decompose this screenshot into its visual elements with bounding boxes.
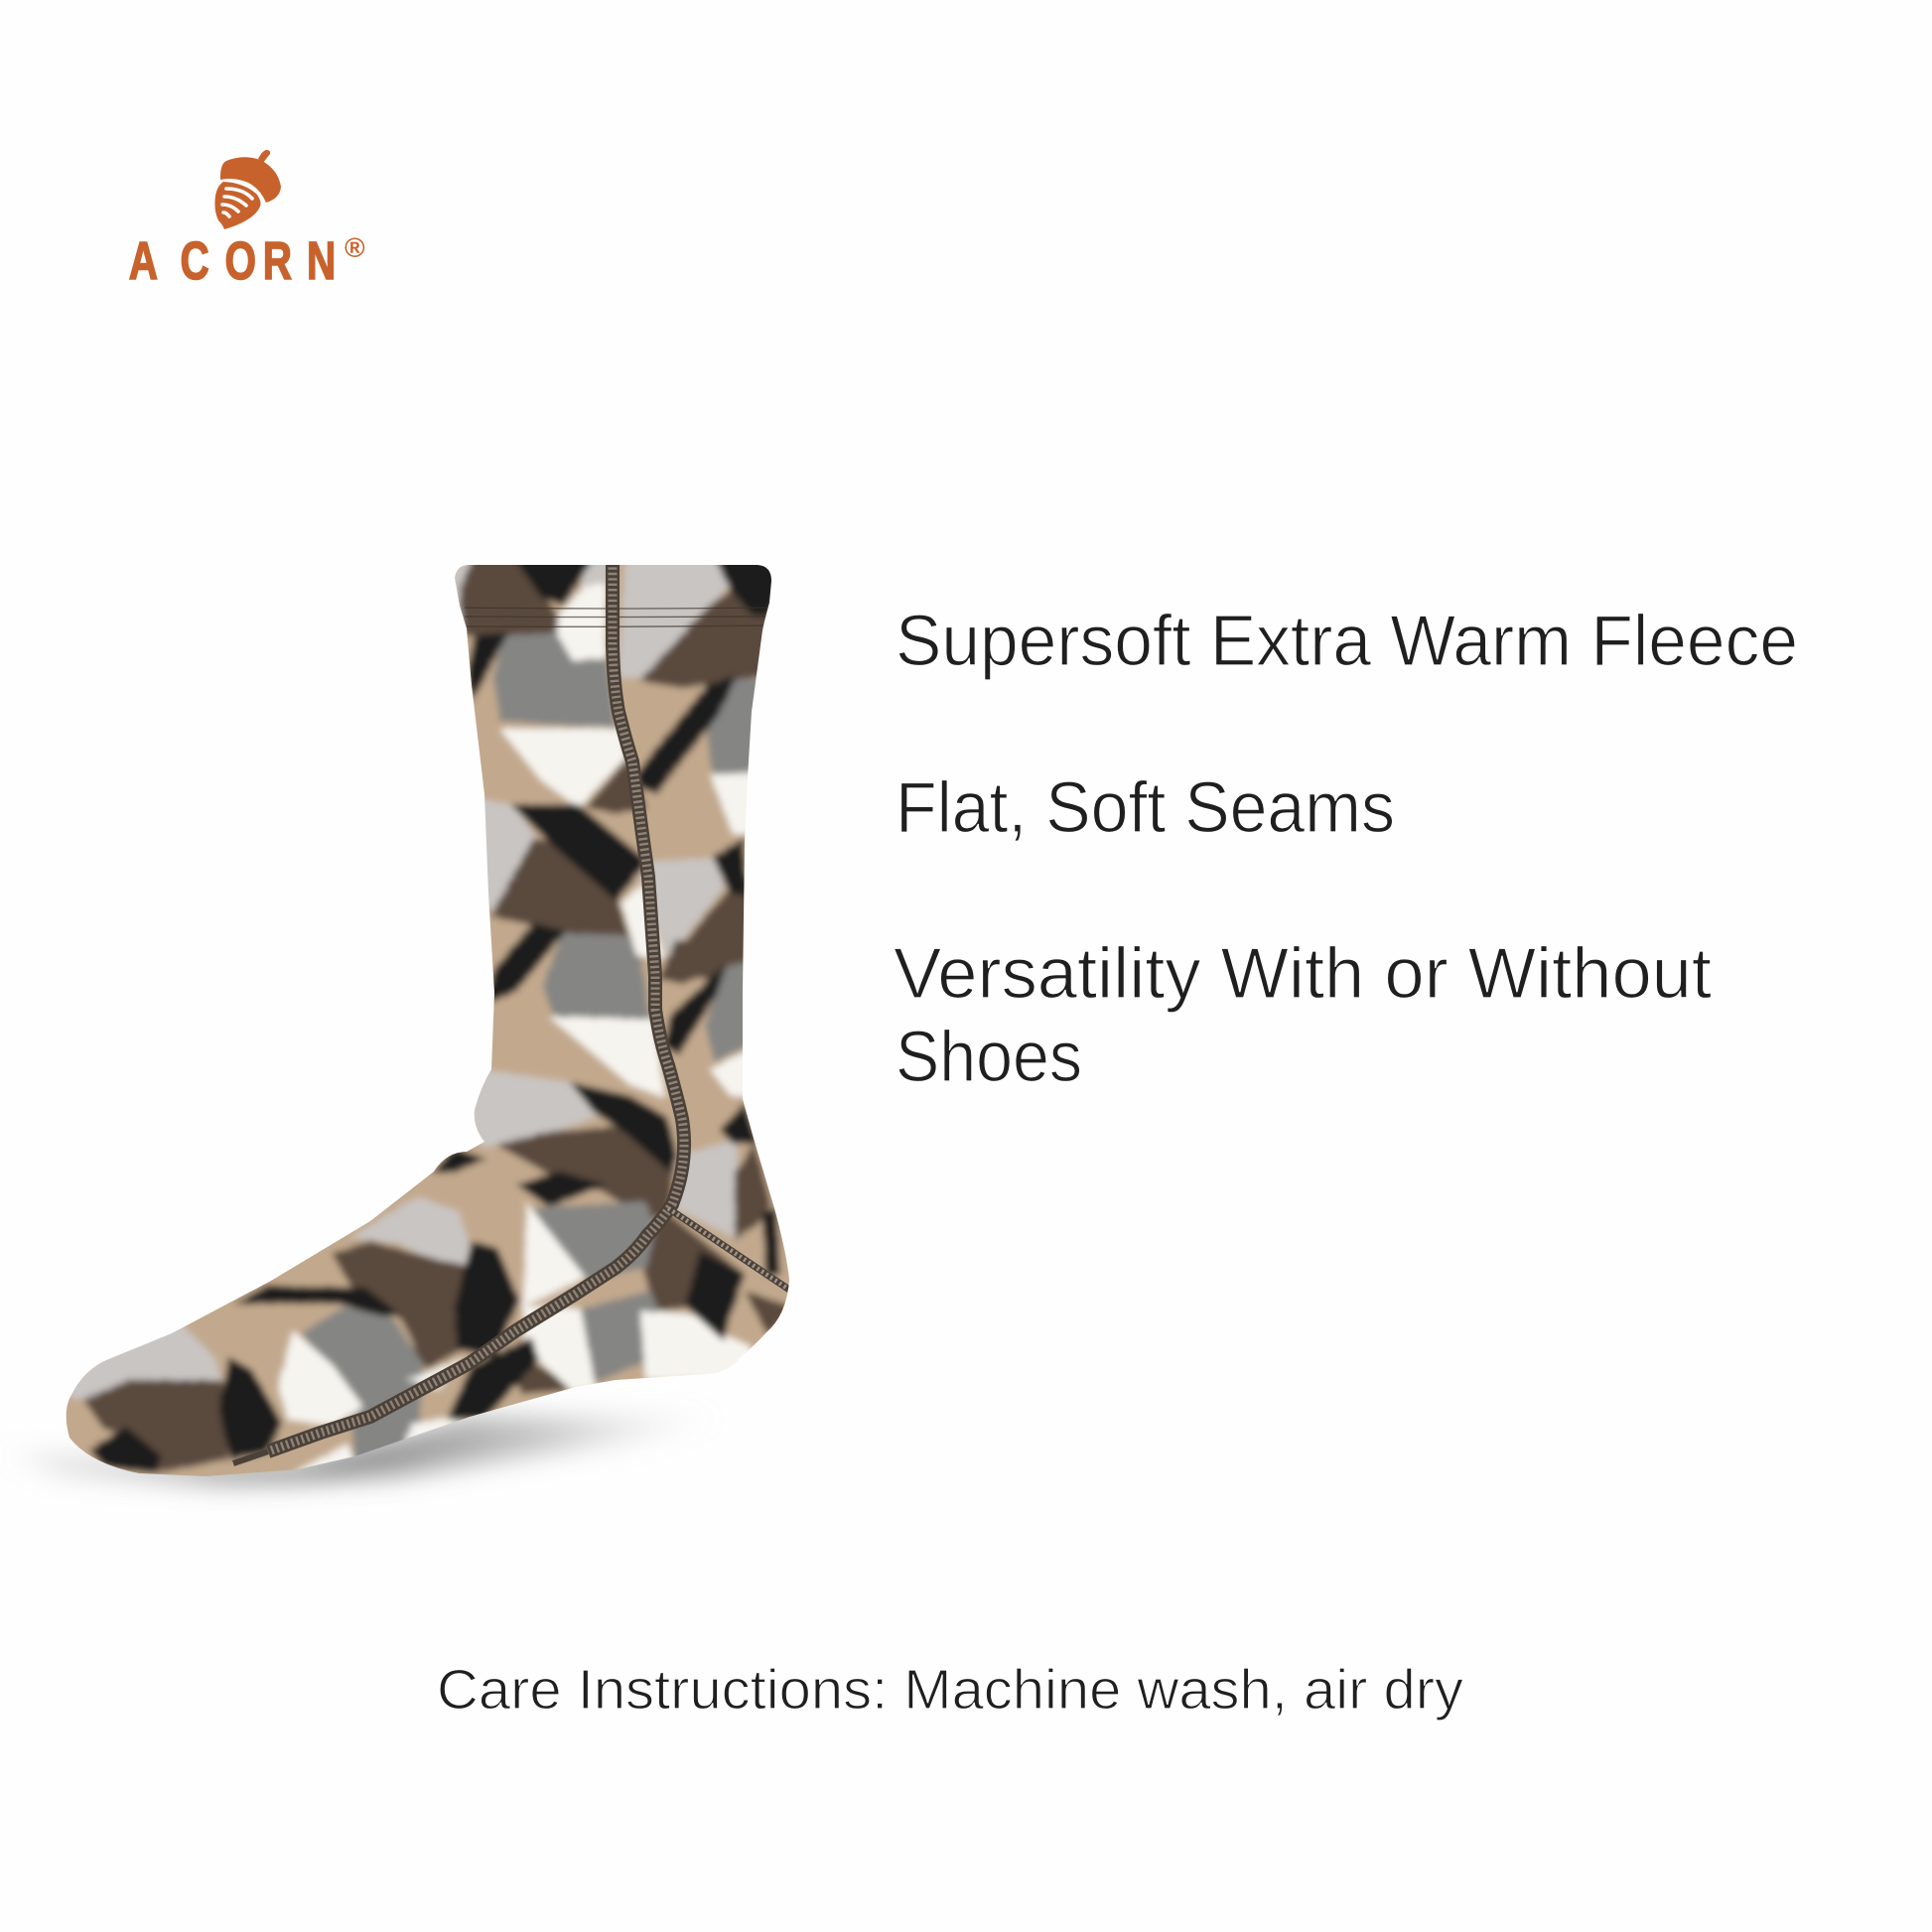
feature: versatility: Versatility With or Without bbox=[894, 934, 1712, 1014]
product image: camo fleece sock bbox=[40, 546, 814, 1489]
feature: versatility bbox=[894, 934, 1712, 1097]
seam: leg to toe bbox=[233, 562, 684, 1463]
seam: heel bbox=[668, 1208, 789, 1290]
fleece camo pattern bbox=[40, 546, 814, 1489]
feature list bbox=[894, 602, 1798, 1097]
sock shadow bbox=[10, 1416, 725, 1483]
feature: fleece: Supersoft Extra Warm Fleece bbox=[896, 602, 1798, 681]
registered mark: ® bbox=[345, 232, 365, 263]
icon: acorn bbox=[214, 150, 281, 229]
care instructions: Care Instructions: Machine wash, air dry bbox=[437, 1658, 1464, 1722]
cuff stitching bbox=[465, 608, 766, 626]
wordmark: ACORN: ACORN bbox=[129, 231, 336, 291]
feature: seams: Flat, Soft Seams bbox=[896, 768, 1395, 848]
logo: Acorn brand bbox=[129, 150, 365, 291]
feature: versatility: Shoes bbox=[896, 1018, 1082, 1097]
